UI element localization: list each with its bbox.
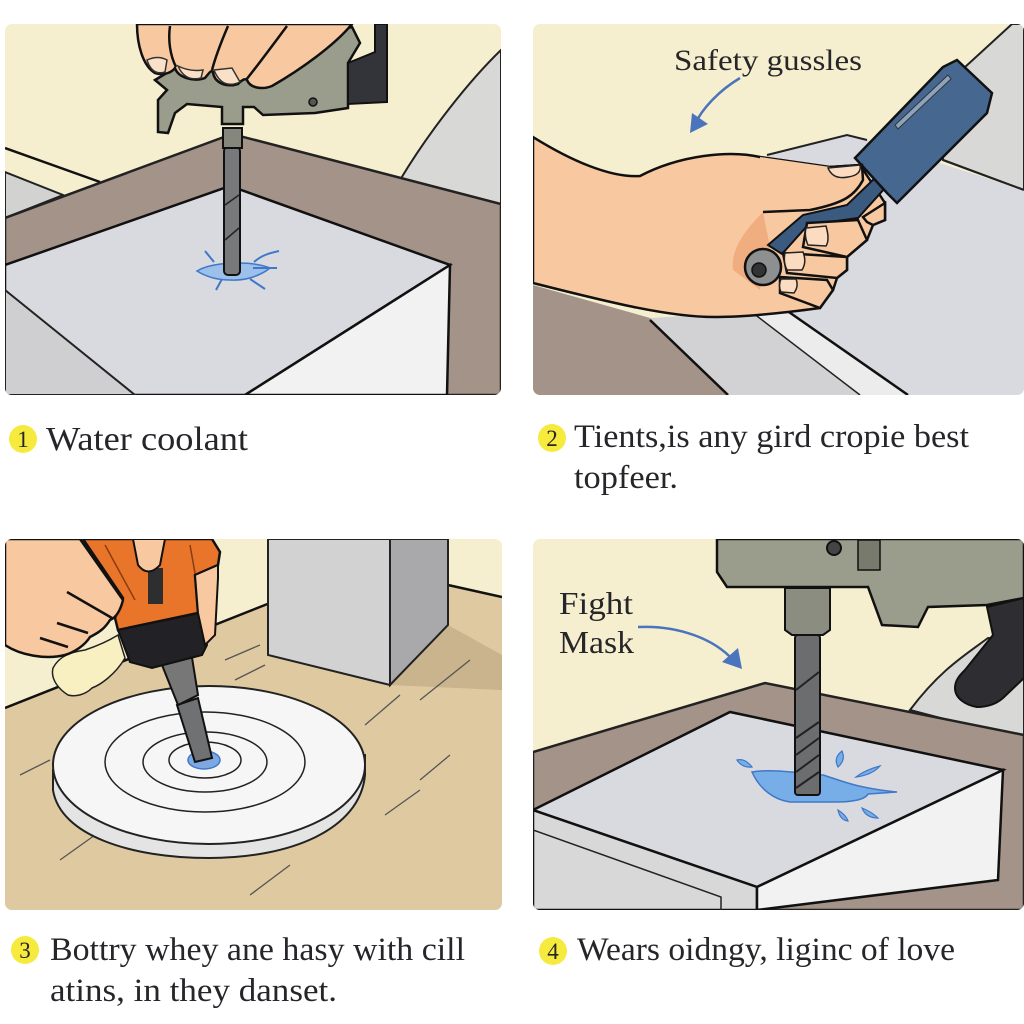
- dust: [52, 635, 125, 696]
- black collar: [118, 613, 207, 668]
- arrow: goggles label: [698, 76, 741, 118]
- orange drill: [83, 539, 220, 630]
- brown counter frame: [5, 134, 501, 395]
- caption: step 2: [538, 419, 969, 496]
- thumb: [760, 157, 861, 168]
- concrete block: [268, 539, 390, 685]
- chisel tool head: [855, 60, 992, 203]
- water splash: [752, 771, 897, 802]
- background grey: [910, 638, 1024, 740]
- ring end: [745, 249, 781, 285]
- caption: step 2: Tients,is any gird cropie best: [574, 419, 969, 455]
- drill bit: [795, 635, 820, 795]
- chisel tool shaft: [768, 176, 885, 254]
- wooden table: [5, 585, 502, 910]
- black handle: [348, 24, 387, 104]
- caption: step 3: Bottry whey ane hasy with cill: [50, 932, 465, 968]
- background grey shape: [400, 50, 501, 210]
- hand: [137, 24, 352, 88]
- stone top: [533, 712, 1003, 887]
- label: fight mask: Fight: [559, 585, 633, 621]
- handle: [955, 598, 1024, 707]
- panel: step 4 bench drill with label: Mask: [559, 624, 634, 660]
- brown counter: [533, 683, 1024, 910]
- caption: step 1: 1: [17, 427, 29, 452]
- panel: step 3 hand drill on disc: [5, 539, 502, 910]
- hand and arm: [533, 137, 885, 317]
- caption: step 3: 3: [19, 938, 31, 963]
- label: safety goggles: Safety gussles: [674, 44, 862, 77]
- stone block top: [5, 186, 450, 395]
- panel: step 2 safety goggles: [533, 24, 1024, 395]
- hand right fingers: [195, 565, 218, 645]
- drill bit: [224, 147, 240, 275]
- chuck collar: [785, 588, 830, 635]
- caption: step 4: 4: [547, 939, 559, 964]
- water splash: [197, 263, 270, 280]
- left hand: [5, 539, 123, 657]
- machine body: [717, 539, 1024, 627]
- caption: step 1: Water coolant: [46, 421, 249, 458]
- caption: step 2: topfeer.: [574, 460, 678, 496]
- fingers: [780, 203, 885, 308]
- arrow: mask label: [638, 627, 733, 660]
- caption: step 4: Wears oidngy, liginc of love: [577, 932, 955, 968]
- panel: step 4 bench drill with label: [533, 539, 1024, 910]
- bit: [177, 698, 212, 762]
- drill body: [155, 27, 360, 133]
- background grey shape: [940, 24, 1024, 190]
- panel: step 1 water coolant drilling: [5, 24, 501, 395]
- caption: step 3: atins, in they danset.: [50, 973, 337, 1009]
- caption: step 3: [11, 932, 465, 1009]
- caption: step 2: 2: [546, 426, 558, 451]
- stone disc: [53, 755, 365, 858]
- thumb: [133, 539, 165, 572]
- stone block right side: [245, 265, 450, 395]
